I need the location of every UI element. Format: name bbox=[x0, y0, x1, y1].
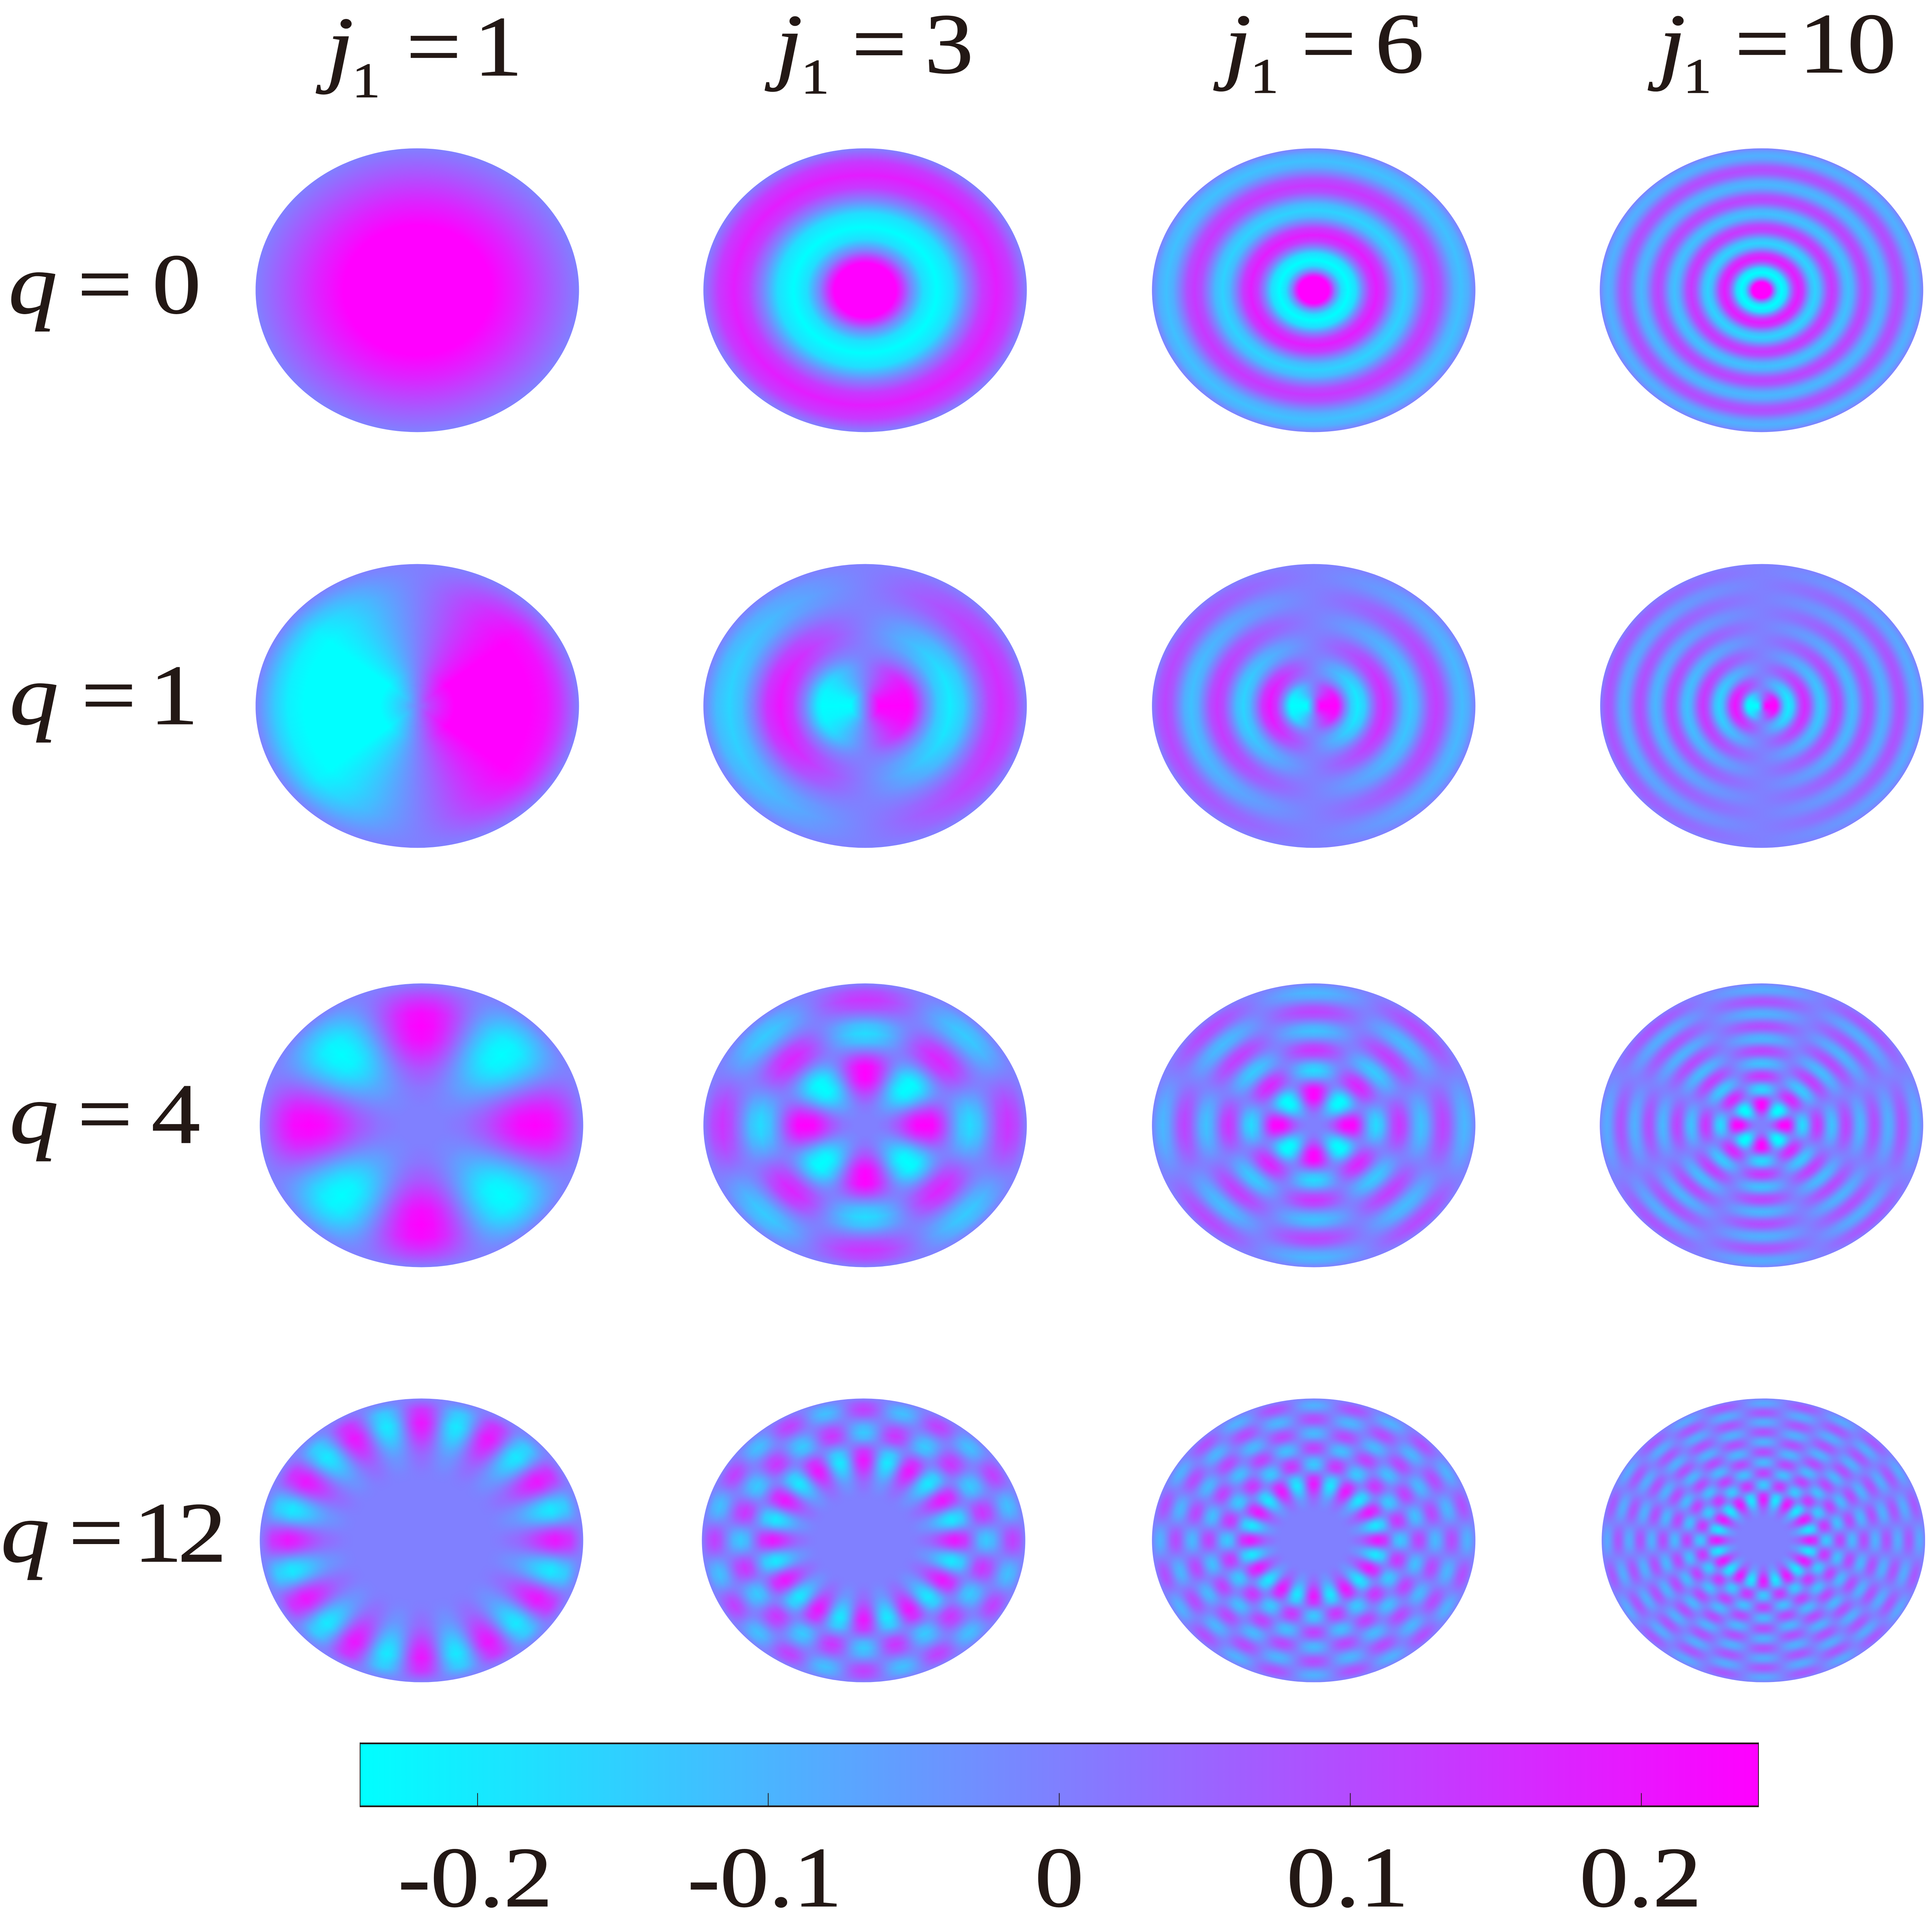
heading: j1 = 1: = bbox=[406, 0, 461, 94]
heading: q = 1: = bbox=[81, 648, 136, 743]
column headers bbox=[316, 0, 1896, 108]
heading: j1 = 1: j bbox=[316, 0, 354, 95]
heading: q = 12: q bbox=[1, 1485, 49, 1580]
heading: q = 4: q bbox=[10, 1067, 58, 1162]
disc: q=12 j1=3 bbox=[702, 1398, 1026, 1682]
heading: q = 4 bbox=[10, 1067, 200, 1162]
heading: j1 = 3 bbox=[765, 0, 973, 104]
disc: q=0 j1=1 bbox=[255, 148, 579, 432]
disc: q=0 j1=3 bbox=[703, 148, 1027, 432]
disc: q=12 j1=1 bbox=[260, 1398, 583, 1682]
heading: q = 4: 4 bbox=[151, 1067, 200, 1162]
heading: q = 1: 1 bbox=[150, 648, 198, 743]
colorbar tick labels: 0.1 bbox=[1287, 1830, 1409, 1925]
heading: q = 12: 1 bbox=[134, 1485, 182, 1580]
disc: q=12 j1=10 bbox=[1602, 1398, 1925, 1682]
heading: q = 1: q bbox=[10, 648, 58, 743]
colorbar tick labels: 0 bbox=[1035, 1830, 1084, 1925]
heading: j1 = 10 bbox=[1648, 0, 1896, 104]
heading: q = 0: 0 bbox=[152, 237, 201, 332]
disc: q=1 j1=1 bbox=[255, 564, 579, 848]
heading: q = 12: 2 bbox=[178, 1485, 226, 1580]
disc: q=4 j1=1 bbox=[260, 983, 583, 1267]
colorbar tick labels: -0.1 bbox=[687, 1830, 842, 1925]
disc: q=1 j1=10 bbox=[1600, 564, 1923, 848]
heading: j1 = 1: 1 bbox=[474, 0, 522, 94]
heading: q = 12: = bbox=[69, 1485, 124, 1580]
disc: q=12 j1=6 bbox=[1152, 1398, 1475, 1682]
heading: j1 = 1: 1 bbox=[352, 53, 380, 108]
heading: q = 1 bbox=[10, 648, 198, 743]
heading: q = 12 bbox=[1, 1485, 226, 1580]
colorbar tick labels bbox=[398, 1830, 1702, 1925]
disc: q=1 j1=6 bbox=[1152, 564, 1475, 848]
colorbar bbox=[360, 1743, 1759, 1925]
colorbar tick labels: -0.2 bbox=[398, 1830, 553, 1925]
heading: q = 0: q bbox=[9, 237, 57, 332]
disc: q=1 j1=3 bbox=[703, 564, 1027, 848]
heading: q = 4: = bbox=[77, 1067, 133, 1162]
disc: q=0 j1=6 bbox=[1152, 148, 1475, 432]
heading: q = 0: = bbox=[77, 237, 133, 332]
colorbar gradient bbox=[360, 1743, 1759, 1807]
panel: grid of disc mode patterns bbox=[255, 148, 1925, 1682]
heading: j1 = 6 bbox=[1213, 0, 1424, 104]
colorbar tick labels: 0.2 bbox=[1580, 1830, 1702, 1925]
disc: q=4 j1=6 bbox=[1152, 983, 1475, 1267]
disc: q=0 j1=10 bbox=[1600, 148, 1923, 432]
heading: j1 = 3: 1 bbox=[801, 49, 829, 104]
disc: q=4 j1=3 bbox=[703, 983, 1027, 1267]
heading: j1 = 3: j bbox=[765, 0, 803, 92]
heading: j1 = 1 bbox=[316, 0, 522, 108]
disc: q=4 j1=10 bbox=[1600, 983, 1923, 1267]
heading: j1 = 10: 1 bbox=[1683, 49, 1711, 104]
heading: j1 = 6: 1 bbox=[1250, 49, 1279, 104]
heading: q = 0 bbox=[9, 237, 201, 332]
row headers bbox=[1, 237, 226, 1580]
